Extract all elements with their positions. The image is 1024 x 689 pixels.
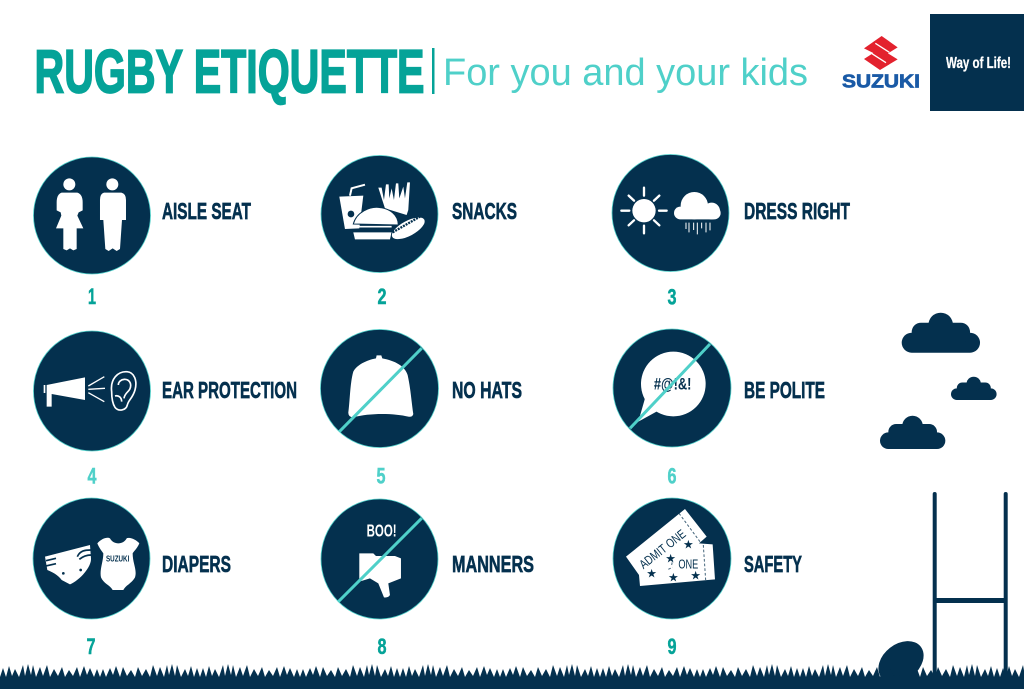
number: 4: [88, 464, 97, 488]
icon: tickets: ★: [665, 551, 676, 565]
item 8: manners: [321, 499, 534, 659]
icon: megaphone and ear: [44, 372, 136, 410]
label: NO HATS: [452, 377, 522, 403]
icon: tickets: ★: [690, 568, 701, 582]
label: AISLE SEAT: [162, 198, 251, 224]
number: 9: [668, 634, 676, 659]
icon: crossed-out thumbs down: BOO!: [367, 521, 397, 541]
label: BE POLITE: [744, 377, 825, 403]
icon: restroom figures: [56, 178, 126, 251]
icon: crossed-out thumbs down: [338, 518, 422, 602]
label: SNACKS: [452, 198, 517, 224]
number: 1: [88, 284, 96, 309]
clouds: [880, 313, 997, 449]
number: 5: [376, 464, 386, 488]
tagline panel: [930, 14, 1024, 111]
icon: diaper and bodysuit: [45, 538, 139, 590]
title: For you and your kids: [443, 52, 808, 94]
icon: fast food: [339, 182, 429, 244]
label: SAFETY: [744, 551, 802, 577]
number: 2: [378, 284, 386, 309]
label: EAR PROTECTION: [162, 377, 297, 403]
Suzuki logo: [842, 36, 920, 92]
icon: tickets: ★: [668, 570, 679, 584]
icon: tickets: ONE: [678, 558, 698, 572]
item 3: dress right: [612, 154, 850, 310]
label: MANNERS: [452, 551, 534, 577]
rugby goal posts: [933, 492, 1008, 678]
icon: crossed-out speech bubble: #@!&!: [654, 374, 691, 393]
number: 7: [86, 634, 96, 659]
icon: crossed-out cap: [339, 348, 422, 432]
label: DRESS RIGHT: [744, 198, 850, 224]
item 9: safety: [613, 498, 802, 659]
item 4: ear protection: [34, 331, 297, 488]
icon: crossed-out speech bubble: [630, 344, 710, 428]
number: 3: [668, 284, 676, 310]
rugby ball: [870, 632, 932, 689]
Suzuki logo: SUZUKI: [842, 72, 920, 92]
item 1: aisle seat: [34, 157, 251, 309]
number: 6: [668, 464, 676, 488]
item 7: diapers: [33, 498, 231, 659]
icon: diaper and bodysuit: SUZUKI: [106, 553, 129, 563]
item 5: no hats: [320, 330, 522, 488]
icon: tickets: ★: [646, 566, 657, 580]
icon: tickets: ADMIT ONE: [637, 527, 689, 572]
item 6: be polite: [613, 329, 825, 488]
icon: tickets: ★: [683, 537, 694, 551]
title: RUGBY ETIQUETTE: [34, 38, 424, 106]
number: 8: [378, 634, 386, 659]
item 2: snacks: [321, 156, 517, 309]
icon: tickets: [626, 509, 715, 586]
label: DIAPERS: [162, 551, 231, 577]
grass strip: [0, 664, 1024, 689]
icon: sun and rain cloud: [621, 188, 721, 234]
